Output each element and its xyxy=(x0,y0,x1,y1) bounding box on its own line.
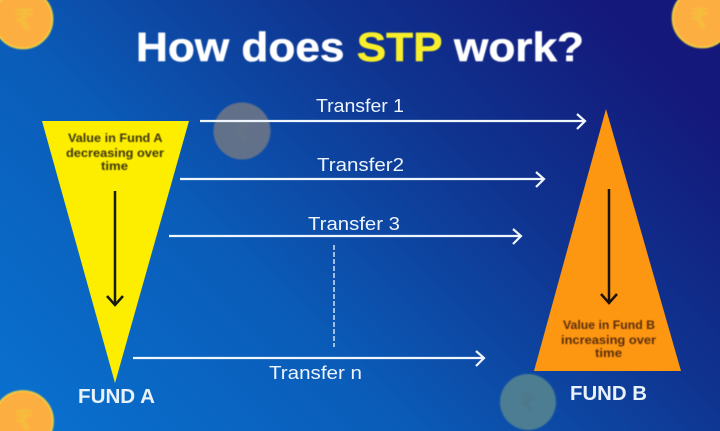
arrow: Transfer n xyxy=(133,351,484,366)
icon: faded coin bottom: ₹ xyxy=(519,389,537,419)
label: Transfer 2: Transfer2 xyxy=(317,155,404,175)
arrow: Fund B increasing xyxy=(601,189,617,303)
icon: rupee coin bottom left xyxy=(0,391,53,431)
arrow: Transfer 1 xyxy=(200,114,585,129)
icon: rupee coin top right xyxy=(672,0,720,48)
icon: rupee coin top left: ₹ xyxy=(14,3,34,38)
label: Transfer n: Transfer n xyxy=(269,363,362,383)
arrow: Transfer 2 xyxy=(180,172,544,187)
label: Fund A: FUND A xyxy=(78,386,155,408)
text: Fund B description: time xyxy=(595,348,622,360)
label: Fund B: FUND B xyxy=(570,383,647,405)
label: Transfer 3: Transfer 3 xyxy=(308,214,400,234)
text: Fund A description: Value in Fund A xyxy=(68,133,162,145)
funnel: Fund A xyxy=(42,121,189,383)
icon: rupee coin top left xyxy=(0,0,52,48)
label: Transfer 1: Transfer 1 xyxy=(316,96,404,116)
text: Fund A description: decreasing over xyxy=(66,148,165,160)
dashed connector xyxy=(333,245,335,347)
title: How does STP work? xyxy=(136,24,584,70)
arrow: Fund A decreasing xyxy=(107,191,123,305)
icon: faded coin centre xyxy=(214,102,270,160)
triangle: Fund B xyxy=(534,109,681,371)
icon: rupee coin top right: ₹ xyxy=(690,2,710,35)
icon: faded coin centre: ₹ xyxy=(233,118,251,148)
text: Fund A description: time xyxy=(101,161,128,173)
text: Fund B description: increasing over xyxy=(561,335,657,347)
icon: faded coin bottom xyxy=(500,374,556,430)
text: Fund B description: Value in Fund B xyxy=(563,320,655,332)
arrow: Transfer 3 xyxy=(169,229,521,244)
